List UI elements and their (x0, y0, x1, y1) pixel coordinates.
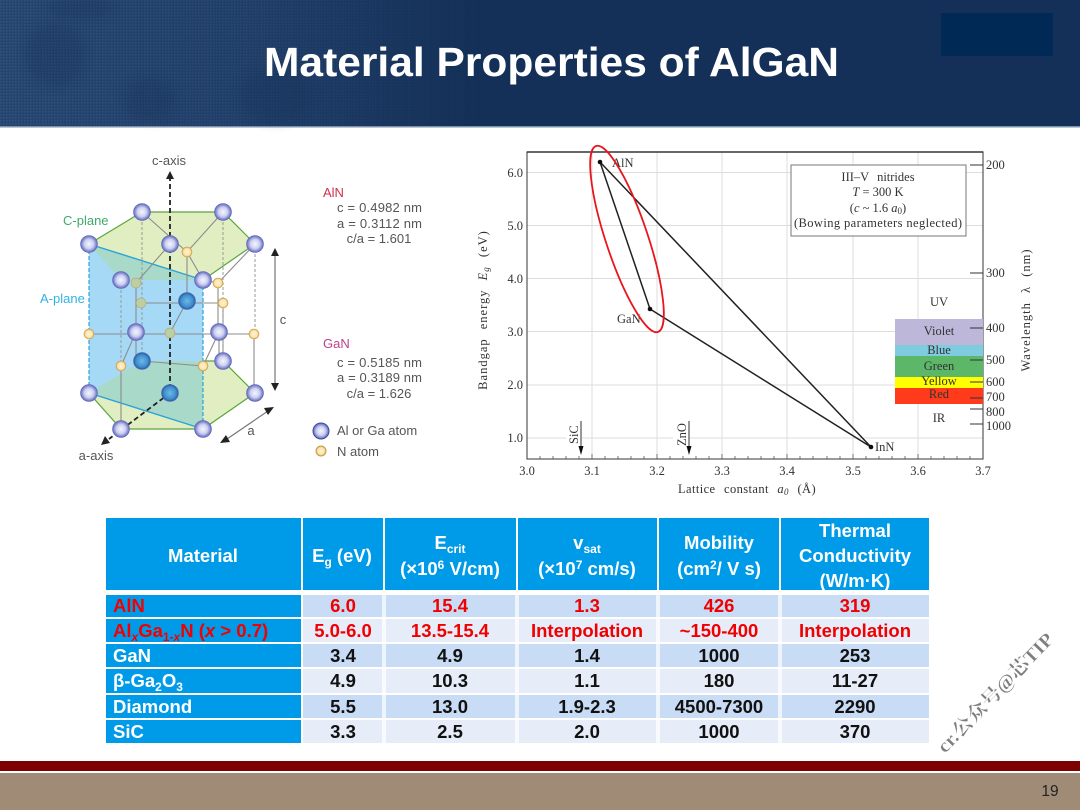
page number: 19 (1041, 783, 1059, 800)
colour bands (895, 295, 983, 425)
row: GaN: 1.4 (574, 645, 601, 666)
x axis title: (Å) (789, 482, 816, 496)
row: SiC (106, 720, 929, 743)
row: Diamond: 13.0 (432, 696, 468, 717)
row: Diamond: 2290 (834, 696, 876, 717)
GaN lattice parameters (323, 336, 422, 401)
row: beta-Ga2O3: 2 (155, 680, 162, 694)
legend box: ) (902, 201, 906, 215)
right wavelength axis: 600 (986, 375, 1005, 389)
bottom axis labels: 3.5 (845, 464, 861, 478)
c-axis: c-axis (152, 153, 186, 168)
dimension c: c (280, 312, 287, 327)
y axis title: g (481, 266, 491, 272)
row: beta-Ga2O3: β-Ga (113, 670, 155, 691)
alloy triangle: GaN (617, 312, 641, 326)
legend box: T = 300 K (852, 185, 904, 199)
atom legend (313, 423, 417, 459)
table header row (106, 518, 929, 591)
legend box: III–V nitrides (841, 170, 915, 184)
row: AlGaN: Ga (138, 620, 164, 641)
table header row: cm/s) (582, 558, 636, 579)
alloy triangle: InN (875, 440, 894, 454)
right wavelength axis: Wavelength λ (nm) (1019, 248, 1033, 372)
row: AlN: AlN (113, 595, 145, 616)
plane labels (40, 213, 109, 306)
table header row: (×10 (400, 558, 438, 579)
row: AlGaN: Interpolation (799, 620, 911, 641)
AlN lattice parameters: AlN (323, 185, 344, 200)
legend box: (Bowing parameters neglected) (794, 216, 962, 230)
row: Diamond: 5.5 (330, 696, 356, 717)
left axis labels: 4.0 (507, 272, 523, 286)
row: Diamond: Diamond (113, 696, 192, 717)
row: AlN: 426 (704, 595, 734, 616)
row: AlN: 6.0 (330, 595, 356, 616)
plane labels: C-plane (63, 213, 109, 228)
AlN lattice parameters (323, 185, 422, 246)
right wavelength axis (970, 158, 1033, 433)
row: AlGaN: Interpolation (531, 620, 643, 641)
atoms (80, 204, 264, 438)
a-axis (79, 393, 170, 463)
atom legend: Al or Ga atom (337, 423, 417, 438)
bottom axis labels: 3.4 (779, 464, 796, 478)
a-axis: a-axis (79, 448, 114, 463)
left axis labels: 6.0 (507, 166, 523, 180)
row: AlGaN: x (130, 630, 140, 644)
bottom axis labels: 3.3 (714, 464, 730, 478)
row: SiC: 2.0 (574, 721, 600, 742)
row: SiC: 370 (840, 721, 870, 742)
SiC marker: SiC (567, 425, 581, 444)
row: beta-Ga2O3: 180 (704, 670, 734, 691)
row: GaN: 4.9 (437, 645, 463, 666)
row: AlGaN: x > 0.7) (205, 620, 268, 641)
AlN lattice parameters: a = 0.3112 nm (337, 216, 422, 231)
AlN lattice parameters: c/a = 1.601 (347, 231, 411, 246)
row: GaN: 253 (840, 645, 870, 666)
watermark: cr.公众号@芯TIP (933, 628, 1059, 757)
plane labels: A-plane (40, 291, 85, 306)
bottom axis labels: 3.7 (975, 464, 991, 478)
table header row: Material (168, 545, 238, 566)
right wavelength axis: 800 (986, 405, 1005, 419)
y axis title: (eV) (476, 230, 490, 266)
colour bands: Blue (927, 343, 951, 357)
row: SiC: 3.3 (330, 721, 356, 742)
table header row: 2 (710, 558, 717, 572)
colour bands: Green (924, 359, 955, 373)
dimension c (271, 248, 287, 391)
row: AlGaN: 5.0-6.0 (314, 620, 372, 641)
bottom axis labels: 3.6 (910, 464, 926, 478)
ZnO marker (673, 418, 692, 455)
GaN lattice parameters: c/a = 1.626 (347, 386, 411, 401)
row: AlN (106, 595, 929, 617)
dimension a (220, 407, 274, 443)
row: Diamond (106, 695, 929, 718)
ZnO marker: ZnO (675, 423, 689, 446)
atom legend: N atom (337, 444, 379, 459)
row: beta-Ga2O3: O (162, 670, 176, 691)
table header row: (×10 (538, 558, 576, 579)
bandgap vs lattice constant chart (476, 139, 1033, 497)
bonds (89, 212, 255, 429)
right wavelength axis: 200 (986, 158, 1005, 172)
row: beta-Ga2O3: 4.9 (330, 670, 356, 691)
properties table (106, 518, 929, 743)
right wavelength axis: 400 (986, 321, 1005, 335)
left axis labels: 5.0 (507, 219, 523, 233)
legend box: 0 (898, 206, 903, 216)
legend box (791, 165, 966, 236)
header banner (0, 0, 1080, 128)
right wavelength axis: 500 (986, 353, 1005, 367)
AlN lattice parameters: c = 0.4982 nm (337, 200, 422, 215)
colour bands: UV (930, 295, 948, 309)
row: beta-Ga2O3: 11-27 (832, 670, 878, 691)
left axis labels: 1.0 (507, 431, 523, 445)
colour bands: Violet (924, 324, 955, 338)
row: Diamond: 4500-7300 (675, 696, 763, 717)
table header row: v (573, 532, 583, 553)
table header row: sat (583, 542, 601, 556)
row: beta-Ga2O3: 1.1 (574, 670, 600, 691)
bottom axis labels: 3.1 (584, 464, 600, 478)
dimension a: a (247, 423, 255, 438)
row: GaN: 3.4 (330, 645, 357, 666)
table header row: (W/m·K) (820, 570, 890, 591)
GaN lattice parameters: GaN (323, 336, 350, 351)
table header row: (cm (677, 558, 710, 579)
row: AlGaN: 13.5-15.4 (411, 620, 490, 641)
row: AlGaN: ~150-400 (680, 620, 758, 641)
row: AlGaN: Al (113, 620, 132, 641)
title: Material Properties of AlGaN (264, 39, 839, 85)
footer bars (0, 761, 1080, 810)
row: beta-Ga2O3: 10.3 (432, 670, 468, 691)
right wavelength axis: 300 (986, 266, 1005, 280)
bottom axis labels (519, 464, 991, 478)
colour bands: IR (933, 411, 946, 425)
left axis labels: 3.0 (507, 325, 523, 339)
table header row: E (312, 545, 324, 566)
crystal structure diagram (40, 153, 422, 463)
alloy triangle: AlN (612, 156, 634, 170)
row: SiC: 1000 (698, 721, 740, 742)
row: AlGaN: 1-x (163, 630, 180, 644)
table header row: g (324, 555, 332, 569)
C-plane hexagons (89, 212, 255, 429)
GaN lattice parameters: a = 0.3189 nm (337, 370, 422, 385)
left axis labels (507, 166, 523, 445)
table header row: (eV) (332, 545, 372, 566)
SiC marker (566, 418, 584, 455)
table header row: / V s) (717, 558, 761, 579)
x axis title: 0 (784, 487, 789, 497)
left axis labels: 2.0 (507, 378, 523, 392)
table header row: 6 (438, 558, 445, 572)
colour bands: Red (929, 387, 950, 401)
bottom axis labels: 3.0 (519, 464, 535, 478)
row: GaN: 1000 (698, 645, 740, 666)
row: AlGaN: N ( (180, 620, 206, 641)
row: AlN: 1.3 (574, 595, 600, 616)
colour bands: Yellow (921, 374, 957, 388)
c-axis (152, 153, 186, 393)
table header row: V/cm) (444, 558, 500, 579)
table header row: Thermal (819, 520, 891, 541)
alloy triangle (598, 156, 894, 454)
row: beta-Ga2O3: 3 (176, 680, 183, 694)
A-plane (89, 244, 203, 429)
row: AlN: 319 (840, 595, 870, 616)
row: SiC: 2.5 (437, 721, 463, 742)
table header row: 7 (576, 558, 583, 572)
x axis title: Lattice constant a (678, 482, 784, 496)
table header row: Mobility (684, 532, 755, 553)
y axis title: Bandgap energy E (476, 272, 490, 390)
table header row: Conductivity (799, 545, 912, 566)
table header row: crit (447, 542, 466, 556)
GaN lattice parameters: c = 0.5185 nm (337, 355, 422, 370)
right wavelength axis: 1000 (986, 419, 1011, 433)
row: AlGaN (106, 619, 929, 644)
row: SiC: SiC (113, 721, 144, 742)
row: Diamond: 1.9-2.3 (558, 696, 616, 717)
bottom axis labels: 3.2 (649, 464, 665, 478)
nitrogen atoms (84, 247, 259, 371)
legend box: (c ~ 1.6 a (850, 201, 898, 215)
row: GaN (106, 644, 929, 667)
grid lines and frame (527, 152, 983, 459)
row: GaN: GaN (113, 645, 151, 666)
row: beta-Ga2O3 (106, 669, 929, 694)
red highlight ellipse (576, 139, 678, 339)
row: AlN: 15.4 (432, 595, 469, 616)
right wavelength axis: 700 (986, 390, 1005, 404)
table header row: E (434, 532, 447, 553)
